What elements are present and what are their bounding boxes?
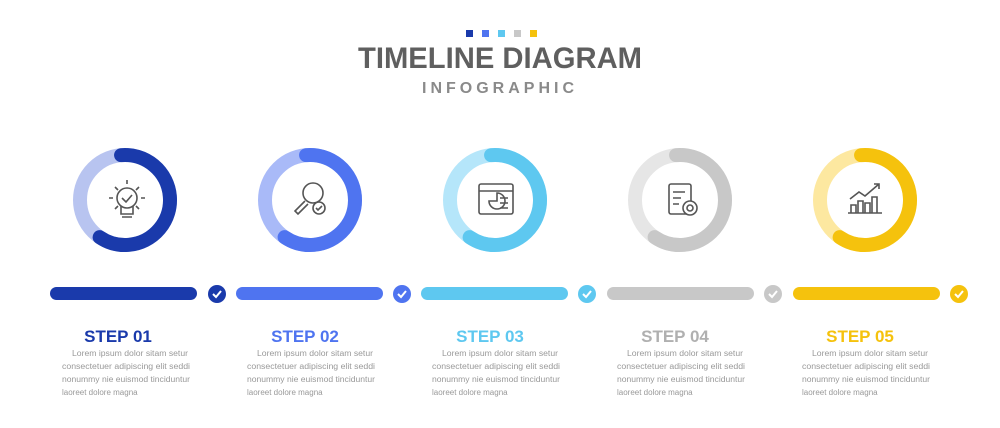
text 1: laoreet dolore magna (62, 388, 138, 397)
text 5 (802, 349, 930, 397)
check 3 (578, 285, 596, 303)
text 2: laoreet dolore magna (247, 388, 323, 397)
label 2: STEP 02 (271, 327, 339, 346)
text 2: nonummy nie euismod tinciduntur (247, 375, 375, 384)
subtitle: INFOGRAPHIC (422, 80, 578, 97)
title block (358, 30, 642, 97)
check 4 (764, 285, 782, 303)
text 3: nonummy nie euismod tinciduntur (432, 375, 560, 384)
ring 3 (446, 151, 544, 249)
text 1 (62, 349, 190, 397)
text 1: consectetuer adipiscing elit seddi (62, 362, 190, 371)
text 3: laoreet dolore magna (432, 388, 508, 397)
text 5: nonummy nie euismod tinciduntur (802, 375, 930, 384)
timeline bar 1 (50, 287, 197, 300)
step 5 (793, 151, 968, 397)
ring 5 (816, 151, 914, 249)
check 5 (950, 285, 968, 303)
icon: light bulb (109, 180, 145, 217)
step 4 (607, 151, 782, 397)
label 5: STEP 05 (826, 327, 894, 346)
text 4: laoreet dolore magna (617, 388, 693, 397)
timeline bar 3 (421, 287, 568, 300)
text 2: Lorem ipsum dolor sitam setur (257, 349, 373, 358)
text 4 (617, 349, 745, 397)
step 2 (236, 151, 411, 397)
check 1 (208, 285, 226, 303)
icon: browser chart (479, 184, 513, 214)
icon: magnifier (295, 183, 325, 214)
text 5: consectetuer adipiscing elit seddi (802, 362, 930, 371)
icon: growth chart (848, 184, 882, 213)
ring 4 (631, 151, 729, 249)
label 3: STEP 03 (456, 327, 524, 346)
text 1: Lorem ipsum dolor sitam setur (72, 349, 188, 358)
timeline bar 2 (236, 287, 383, 300)
color dots (466, 30, 537, 37)
text 4: Lorem ipsum dolor sitam setur (627, 349, 743, 358)
step 1 (50, 151, 226, 397)
text 5: Lorem ipsum dolor sitam setur (812, 349, 928, 358)
ring 2 (261, 151, 359, 249)
text 5: laoreet dolore magna (802, 388, 878, 397)
text 1: nonummy nie euismod tinciduntur (62, 375, 190, 384)
text 3 (432, 349, 560, 397)
ring 1 (76, 151, 174, 249)
text 3: consectetuer adipiscing elit seddi (432, 362, 560, 371)
timeline bar 4 (607, 287, 754, 300)
text 2: consectetuer adipiscing elit seddi (247, 362, 375, 371)
step 3 (421, 151, 596, 397)
text 4: nonummy nie euismod tinciduntur (617, 375, 745, 384)
title: TIMELINE DIAGRAM (358, 42, 642, 75)
timeline bar 5 (793, 287, 940, 300)
text 2 (247, 349, 375, 397)
check 2 (393, 285, 411, 303)
text 3: Lorem ipsum dolor sitam setur (442, 349, 558, 358)
icon: checklist target (669, 184, 697, 215)
label 4: STEP 04 (641, 327, 709, 346)
text 4: consectetuer adipiscing elit seddi (617, 362, 745, 371)
label 1: STEP 01 (84, 327, 152, 346)
